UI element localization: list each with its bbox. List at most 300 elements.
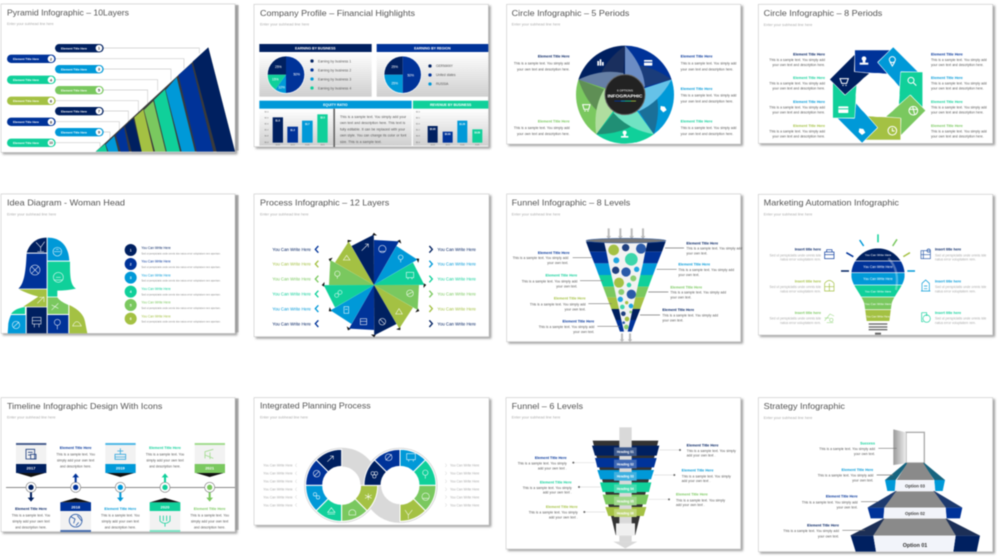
left text: navy: Element Title Here — [793, 52, 825, 56]
text 2021: and description here. — [194, 526, 225, 530]
pill 6: 6 — [50, 98, 53, 103]
left text: navy: Element Title Here — [538, 54, 570, 58]
title: Funnel – 6 Levels — [512, 401, 584, 411]
heading 03 — [614, 472, 637, 481]
right text 3 — [935, 311, 987, 325]
left text 4: Element Title Here — [562, 320, 594, 324]
card 2020 — [150, 498, 180, 532]
subhead: Enter your subhead line here — [260, 415, 308, 419]
text: cyan element: Element Title Here — [841, 468, 873, 472]
input arrows — [606, 228, 645, 239]
text 2017: simply add your own text — [12, 520, 50, 524]
arrow up 2020 — [162, 473, 168, 482]
left text 1 — [518, 456, 567, 470]
text 2017: and description here. — [15, 526, 47, 530]
pill 10: Element Title Here — [13, 141, 39, 145]
panel: equity ratio — [259, 101, 412, 146]
text block: size. This is a sample text. — [340, 140, 382, 144]
right text: blue: your own text and description here. — [681, 67, 733, 71]
right text 1: This is a sample text. You simply add — [686, 247, 742, 251]
arrow up 2018 — [72, 473, 79, 482]
left text 3 — [530, 297, 586, 311]
left text 3 — [770, 311, 821, 325]
slide: Strategy Infographic — [758, 398, 993, 552]
title: Strategy Infographic — [764, 401, 846, 411]
left text 2: Sed ut perspiciatis unde omnis iste — [770, 285, 821, 289]
right labels: You Can Write Here — [437, 321, 477, 326]
text 2019: and description here. — [105, 526, 136, 530]
subhead: Enter your subhead line here — [512, 23, 560, 27]
text 2018: simply add your own text — [57, 459, 94, 463]
icon: tag — [660, 106, 667, 112]
heading 05: Heading 05 — [617, 499, 634, 503]
icon: cart — [840, 79, 848, 85]
panel: revenue by business: REVENUE BY BUSINESS — [430, 103, 472, 107]
pill 9 — [55, 128, 104, 136]
right text 2: natus error voluptatem rem. — [935, 289, 976, 293]
subhead: Enter your subhead line here — [7, 212, 56, 216]
right text 3: add your own text . — [676, 503, 705, 507]
pill 6: Element Title Here — [13, 99, 39, 103]
right text 3: This is a sample text. You simply add — [670, 291, 726, 295]
pill 5: 5 — [98, 88, 101, 93]
right text 2: Element Title Here — [682, 469, 714, 473]
panel: equity ratio: $1.7 — [305, 124, 310, 126]
icon: stamp — [621, 131, 628, 138]
left labels: You Can Write Here — [272, 262, 312, 267]
left text 1: Sed ut perspiciatis unde omnis iste — [770, 253, 821, 257]
pill 9: Element Title Here — [61, 130, 87, 134]
slide frame — [758, 194, 993, 335]
list item 1: You Can Write Here — [141, 246, 171, 250]
right text 1: Insert title here — [935, 247, 961, 251]
pill 10 — [7, 139, 56, 147]
left text 2 — [770, 279, 821, 293]
right text: blue: This is a sample text. You simply add — [931, 58, 987, 62]
centre hub: INFOGRAPHIC — [608, 94, 643, 100]
text 2021 — [190, 507, 229, 530]
left text 2: This is a sample text. You simply — [523, 486, 572, 490]
left text 3: Sed ut perspiciatis unde omnis iste — [770, 317, 821, 321]
funnel left wall — [586, 242, 624, 332]
left text 2 — [522, 274, 577, 288]
panel: earning by region: United states — [436, 73, 456, 77]
right loop segments — [364, 442, 443, 529]
panel: equity ratio: $0.8 — [265, 136, 269, 138]
right text: teal: your own text and description here. — [931, 111, 984, 115]
panel: equity ratio: EQUITY RATIO — [323, 103, 348, 107]
slide shadow strip — [235, 195, 239, 332]
bubbles — [608, 244, 646, 329]
text: success: Success — [860, 442, 875, 446]
left text 2: your own text. — [556, 284, 577, 288]
panel: earning by business: EARNING BY BUSINESS — [295, 46, 336, 50]
left text: lime: This is a sample text. You simply add — [769, 130, 825, 134]
panel: earning by business: 10% — [278, 85, 285, 89]
slide frame — [254, 398, 489, 525]
list item 3: You Can Write Here — [141, 273, 171, 277]
centre hub: 6 OPTIONS — [617, 88, 633, 92]
left text: green: This is a sample text. You simply add — [514, 126, 570, 130]
right text 1 — [686, 241, 742, 256]
icon: card — [838, 106, 848, 113]
right text: cyan: This is a sample text. You simply add — [931, 82, 987, 86]
title: Funnel Infographic – 8 Levels — [512, 198, 631, 208]
divider bar — [333, 109, 335, 147]
heading 05 — [614, 497, 637, 505]
right text: teal — [931, 100, 987, 115]
list item 5 — [125, 299, 221, 311]
text 2018 — [56, 446, 95, 469]
heading 04: Heading 04 — [617, 487, 634, 491]
left labels: You Can Write Here — [263, 472, 293, 476]
step 2 — [867, 491, 962, 518]
text 2017: Element Title Here — [15, 507, 47, 511]
panel: revenue by business — [413, 101, 488, 146]
text 2019 — [101, 507, 140, 530]
slide frame — [1, 398, 235, 532]
funnel rim — [586, 238, 666, 243]
funnel right wall — [628, 242, 666, 332]
panel: earning by region: GERMANY — [436, 64, 454, 68]
slide shadow strip — [235, 398, 239, 530]
right text: green — [931, 124, 987, 139]
right labels: You Can Write Here — [450, 472, 480, 476]
right labels: You Can Write Here — [450, 488, 480, 492]
funnel interior — [604, 242, 648, 332]
panel: earning by business: Earning by business 1 — [318, 59, 351, 63]
connector lines — [572, 449, 681, 513]
segment icons — [313, 454, 429, 519]
pill 4: Element Title Here — [13, 78, 39, 82]
left text: navy: your own text and description here. — [772, 63, 825, 67]
right labels: You Can Write Here — [437, 247, 477, 252]
slide frame — [507, 4, 741, 144]
left text: teal: your own text and description here. — [772, 87, 825, 91]
left loop segments — [298, 442, 378, 529]
text: cyan element: This is a sample text. You simply add — [818, 474, 873, 478]
heading 04 — [614, 484, 637, 493]
heading 02 — [614, 460, 637, 468]
list item 2: Sed ut perspiciatis unde omnis iste natus error voluptatem rem aperiam. — [141, 266, 221, 269]
text 2020 — [146, 446, 184, 469]
infinity grey band — [305, 448, 437, 522]
icon: right cyan — [921, 280, 930, 291]
text 2020: This is a sample text. You — [146, 452, 184, 456]
card 2017: 2017 — [27, 466, 36, 471]
circle chart — [558, 35, 686, 162]
text block: own style. You can change its color or font — [340, 133, 406, 137]
panel: earning by region: RUSSIA — [436, 82, 449, 86]
panel: revenue by business: $2.4 — [416, 111, 421, 113]
pill 9: 9 — [98, 130, 101, 135]
slide: Funnel 6 Levels — [506, 398, 741, 549]
text 2018: Element Title Here — [60, 446, 92, 450]
ring of eight segments — [830, 47, 926, 143]
text: success — [819, 442, 875, 456]
slide frame — [758, 4, 993, 143]
left text 2: This is a sample text. You simply add — [522, 279, 577, 283]
text: navy element — [783, 523, 839, 538]
right text 1: Sed ut perspiciatis unde omnis iste — [935, 253, 987, 257]
slide frame — [506, 398, 741, 549]
panel: equity ratio: $2.4 — [265, 111, 269, 113]
right labels — [437, 247, 477, 326]
right text: green: Element Title Here — [931, 124, 963, 128]
right text 2: your own text. — [678, 273, 699, 277]
icon: pin — [889, 57, 895, 66]
text: navy element: your own text. — [818, 534, 839, 538]
panel: equity ratio: 2021 — [320, 144, 325, 146]
right text 2: This is a sample text. You simply — [682, 474, 731, 478]
right text 2: This is a sample text. You simply add — [678, 268, 734, 272]
connector arrows — [842, 448, 897, 530]
panel: earning by region: 50% — [407, 73, 414, 77]
left text: cyan — [769, 100, 825, 115]
list item 1: Sed ut perspiciatis unde omnis iste natus error voluptatem rem aperiam. — [141, 252, 221, 255]
step 1 — [850, 519, 980, 552]
panel: equity ratio: 2019 — [290, 144, 296, 146]
card 2021 — [195, 443, 225, 477]
right labels: You Can Write Here — [450, 480, 480, 484]
panel: equity ratio: 2020 — [305, 144, 310, 146]
pill 7 — [55, 107, 104, 115]
panel: revenue by business: $0.4 — [416, 142, 421, 144]
card 2019 — [105, 443, 136, 477]
panel: earning by business: 50% — [293, 73, 300, 77]
slide: Integrated Planning Process — [254, 398, 489, 529]
pill 3 — [55, 65, 104, 73]
slide: Pyramid Infographic — [1, 4, 239, 152]
right text 4: This is a sample text. You simply add — [662, 313, 718, 317]
output arrows — [620, 333, 632, 342]
subhead: Enter your subhead line here — [260, 23, 309, 27]
pill 1 — [55, 44, 104, 52]
card 2018: 2018 — [71, 504, 81, 509]
right text: cyan — [931, 76, 987, 91]
slide: Funnel 8 Levels — [507, 194, 742, 342]
light bulb: You Can Write Here — [866, 315, 890, 319]
slide: Woman Head — [1, 194, 239, 333]
panel: revenue by business: 2020 — [460, 144, 465, 146]
right text 1: natus error voluptatem rem. — [935, 258, 976, 262]
pill 3: Element Title Here — [61, 67, 87, 71]
left labels: You Can Write Here — [272, 277, 312, 282]
left text 3 — [529, 505, 578, 519]
list item 5: Sed ut perspiciatis unde omnis iste natus error voluptatem rem aperiam. — [141, 307, 221, 310]
subhead: Enter your subhead line here — [764, 212, 812, 216]
left text 2: Element Title Here — [545, 274, 577, 278]
right text 2: Element Title Here — [678, 262, 710, 266]
text 2021: This is a sample text. You — [190, 514, 229, 518]
right text: green: your own text and description here. — [931, 135, 984, 139]
heading 02: Heading 02 — [617, 462, 634, 466]
right text: blue — [681, 54, 737, 71]
right text 1: Element Title Here — [686, 241, 718, 245]
panel: equity ratio: $1.2 — [265, 130, 269, 132]
list item 6 — [125, 313, 221, 325]
left text: green — [514, 119, 570, 136]
right text 1 — [687, 443, 736, 458]
bulb base — [869, 323, 887, 335]
panel: revenue by business: 2018 — [430, 144, 436, 146]
card 2018 — [60, 498, 91, 532]
list item 6: Sed ut perspiciatis unde omnis iste natus error voluptatem rem aperiam. — [141, 321, 221, 324]
right text: green: This is a sample text. You simply add — [931, 130, 987, 134]
left labels — [272, 247, 312, 326]
text: navy element: This is a sample text. You simply add — [783, 529, 839, 533]
panel: earning by business — [259, 44, 372, 97]
left text 4: your own text. — [573, 330, 594, 334]
panel: equity ratio: $1.2 — [290, 130, 296, 132]
left text 2: Element Title Here — [540, 480, 572, 484]
panel: earning by business: 15% — [272, 77, 279, 81]
right text 4: your own text. — [662, 318, 683, 322]
step 3 — [885, 463, 945, 491]
right text: blue: This is a sample text. You simply add — [681, 61, 737, 65]
title: Timeline Infographic Design With Icons — [7, 401, 163, 411]
left text: green: Element Title Here — [538, 119, 570, 123]
right text: cyan: your own text and description here. — [931, 87, 984, 91]
right chevrons — [429, 246, 432, 327]
right text 3: Sed ut perspiciatis unde omnis iste — [935, 317, 987, 321]
right text 3: natus error voluptatem rem. — [935, 321, 976, 325]
title: Company Profile – Financial Highlights — [260, 8, 416, 18]
left labels — [263, 464, 297, 507]
subhead: Enter your subhead line here — [7, 22, 54, 26]
light bulb: You Can Write Here — [865, 302, 892, 306]
subhead: Enter your subhead line here — [764, 416, 812, 420]
node 2020 — [160, 482, 170, 492]
list item 4: 4 — [130, 290, 132, 294]
right text: teal — [681, 119, 737, 136]
left text 2 — [523, 480, 572, 494]
left text: teal — [769, 76, 825, 91]
right text 3: This is a sample text. You simply — [676, 498, 725, 502]
right text 2 — [682, 469, 731, 483]
left text: cyan: your own text and description here. — [772, 111, 825, 115]
list item 6: 6 — [130, 317, 132, 321]
left text 2: Insert title here — [795, 279, 821, 283]
node 2019 — [115, 482, 125, 492]
light rays — [841, 234, 915, 271]
subhead: Enter your subhead line here — [764, 23, 812, 27]
right text 1 — [935, 247, 987, 262]
list item 2: 2 — [130, 262, 132, 266]
pill 1: 1 — [98, 46, 101, 51]
text 2018: This is a sample text. You — [56, 452, 95, 456]
title: Circle Infographic – 8 Periods — [764, 8, 883, 18]
list item 3 — [125, 272, 221, 284]
left text: cyan: This is a sample text. You simply add — [769, 106, 825, 110]
panel: equity ratio: $0.4 — [265, 142, 269, 144]
right text 4: Element Title Here — [662, 308, 694, 312]
left text: teal: This is a sample text. You simply add — [769, 82, 825, 86]
pill 2: Element Title Here — [13, 57, 39, 61]
left text: lime: Element Title Here — [793, 124, 825, 128]
pill 5 — [55, 86, 104, 94]
right text 3 — [676, 493, 725, 507]
title: Circle Infographic – 5 Periods — [512, 8, 630, 18]
right text: cyan: your own text and description here. — [681, 100, 733, 104]
heading 06: Heading 06 — [617, 511, 634, 515]
right text: cyan — [681, 87, 737, 104]
panel: revenue by business: 2019 — [445, 144, 451, 146]
subhead: Enter your subhead line here — [260, 212, 309, 216]
slide frame — [507, 194, 741, 342]
left text 3: Element Title Here — [554, 297, 586, 301]
list item 4 — [125, 286, 221, 298]
panel: equity ratio: 2018 — [275, 144, 281, 146]
list item 5: 5 — [130, 303, 132, 307]
text: success: your own text. — [854, 452, 875, 456]
left text: cyan: Element Title Here — [793, 100, 825, 104]
dark funnel body — [593, 441, 658, 535]
pill 5: Element Title Here — [61, 88, 87, 92]
slide frame — [1, 4, 235, 152]
arrow down 2019 — [117, 492, 124, 502]
right text: teal: Element Title Here — [931, 100, 963, 104]
text block — [335, 109, 412, 146]
text 2020: simply add your own text — [146, 459, 184, 463]
node 2018 — [71, 482, 81, 492]
left text 3: add your own text . — [549, 515, 578, 519]
right text: teal: Element Title Here — [681, 119, 713, 123]
slide: Timeline — [1, 398, 239, 532]
silhouette icons — [12, 242, 81, 329]
panel: earning by business: Earning by business 3 — [318, 77, 351, 81]
text 2020: Element Title Here — [149, 446, 181, 450]
right text 3 — [670, 285, 726, 300]
slide: Process Infographic 12 Layers — [254, 194, 489, 338]
subhead: Enter your subhead line here — [512, 416, 560, 420]
panel: earning by region: EARNING BY REGION — [414, 46, 451, 50]
text 2019: Element Title Here — [104, 507, 136, 511]
icon: right teal — [922, 313, 930, 322]
text: success: This is a sample text. You simply add — [819, 447, 875, 451]
title: Integrated Planning Process — [260, 401, 371, 411]
left text 4 — [539, 320, 594, 334]
text 2020: and description here. — [149, 465, 181, 469]
left text 1: This is a sample text. You simply — [518, 461, 567, 465]
slide: Company Profile — [254, 4, 488, 147]
pill 8: Element Title Here — [13, 120, 39, 124]
panel: revenue by business: $0.80 — [474, 132, 481, 134]
left text: navy: This is a sample text. You simply add — [514, 61, 570, 65]
left labels: You Can Write Here — [263, 503, 293, 507]
right text: teal: your own text and description here. — [681, 132, 733, 136]
door — [893, 429, 924, 465]
panel: revenue by business: $1.20 — [459, 124, 466, 126]
right text 2: Insert title here — [935, 279, 961, 283]
title: Process Infographic – 12 Layers — [260, 198, 390, 208]
icon: left green — [825, 314, 834, 323]
right text: teal: This is a sample text. You simply add — [681, 126, 737, 130]
node 2021 — [205, 482, 215, 492]
centre hub — [605, 75, 645, 115]
right labels — [445, 464, 480, 507]
text 2017: This is a sample text. You — [12, 514, 50, 518]
left chevrons — [315, 246, 318, 327]
text: cyan element: your own text. — [852, 479, 873, 483]
icon: globe — [909, 106, 918, 115]
title: Idea Diagram - Woman Head — [7, 198, 125, 208]
pill 8 — [7, 118, 56, 126]
icon: tag — [859, 128, 865, 135]
step 2: Option 02 — [905, 511, 926, 516]
panel: revenue by business: $1.6 — [416, 123, 421, 125]
pill 4: 4 — [50, 77, 53, 82]
